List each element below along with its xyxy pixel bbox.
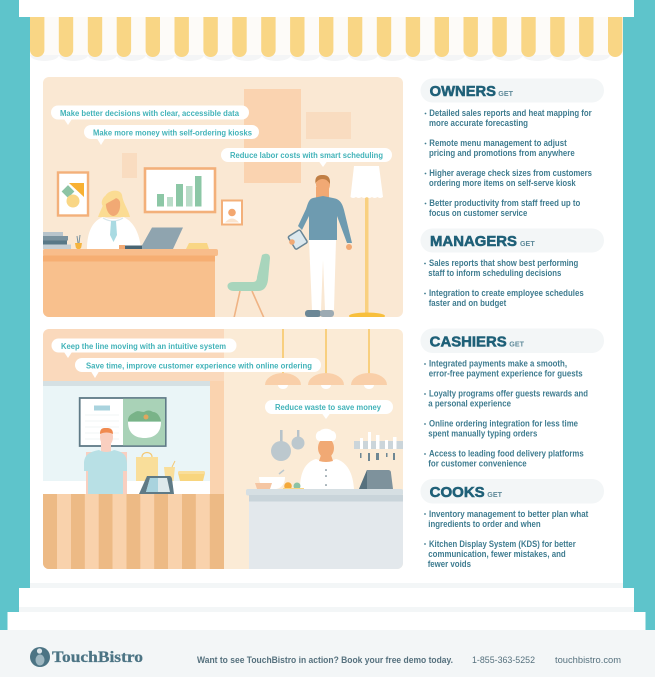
icon: abstract picture frame — [58, 172, 88, 216]
managers benefits list: Integration to create employee schedules — [429, 288, 584, 298]
owners benefits list: Better productivity from staff freed up to — [429, 198, 581, 208]
owners benefits list: Detailed sales reports and heat mapping for — [429, 108, 592, 118]
owners benefits list: ordering more items on self-serve kiosk — [429, 178, 576, 188]
managers benefits list: staff to inform scheduling decisions — [428, 268, 561, 278]
stack of books and pencil cup — [43, 232, 82, 249]
heading: owners — [420, 78, 604, 102]
cooks benefits list: Inventory management to better plan what — [429, 509, 588, 519]
heading: cooks: GET — [487, 490, 502, 499]
heading: managers: MANAGERS — [430, 234, 517, 250]
section: cashiers — [420, 328, 604, 469]
cashiers benefits list: Loyalty programs offer guests rewards and — [429, 389, 588, 399]
callout: self-ordering kiosks — [84, 125, 259, 145]
counter with stripes — [43, 494, 224, 569]
owners benefits list — [425, 108, 592, 218]
cooks benefits list: fewer voids — [428, 559, 471, 569]
chef — [300, 429, 354, 489]
owners benefits list: Higher average check sizes from customers — [429, 168, 592, 178]
website: touchbistro.com — [555, 655, 621, 665]
heading: owners: GET — [498, 89, 513, 98]
callout: better decisions — [51, 106, 249, 125]
callout: intuitive system: Keep the line moving with an intuitive system — [61, 341, 226, 351]
heading: cashiers: CASHIERS — [430, 334, 507, 350]
footer bar — [0, 630, 655, 677]
managers benefits list — [424, 258, 584, 308]
heading: owners: OWNERS — [430, 84, 496, 100]
cooks benefits list — [424, 509, 588, 569]
call to action: Want to see TouchBistro in action? Book your free demo today. — [197, 655, 453, 665]
cooks benefits list: ingredients to order and when — [428, 519, 541, 529]
callout: self-ordering kiosks: Make more money with self-ordering kiosks — [93, 128, 252, 138]
icon: portrait frame — [222, 200, 242, 224]
cooks benefits list: Kitchen Display System (KDS) for better — [429, 539, 576, 549]
owners benefits list: Remote menu management to adjust — [429, 138, 567, 148]
desk — [43, 249, 218, 318]
awning top bar — [19, 0, 634, 17]
storefront steps — [8, 583, 646, 630]
cashiers benefits list: Integrated payments make a smooth, — [429, 359, 567, 369]
cashier — [84, 428, 127, 494]
callout: intuitive system — [52, 338, 236, 358]
section: cooks — [420, 479, 604, 569]
heading: managers — [420, 228, 604, 252]
heading: cooks: COOKS — [430, 485, 485, 501]
heading: cashiers — [420, 328, 604, 353]
bowls and food — [255, 470, 304, 490]
callout: smart scheduling — [221, 148, 392, 167]
kitchen counter — [246, 489, 403, 570]
panel: owner office scene — [43, 77, 403, 320]
heading: cashiers: GET — [509, 340, 524, 348]
callout: smart scheduling: Reduce labor costs with smart scheduling — [230, 150, 383, 160]
cashiers benefits list: Access to leading food delivery platforms — [429, 449, 584, 459]
heading: managers: GET — [520, 239, 535, 248]
kitchen display tablet — [359, 470, 393, 489]
callout: online ordering — [75, 358, 321, 378]
laptop — [119, 228, 183, 249]
callout: reduce waste — [265, 400, 393, 419]
callout: online ordering: Save time, improve customer experience with online ordering — [86, 360, 312, 370]
panel: restaurant counter and kitchen scene — [43, 329, 403, 570]
cashiers benefits list: spent manually typing orders — [428, 429, 537, 439]
section: owners — [420, 78, 604, 218]
hanging lamps — [265, 329, 387, 389]
owners benefits list: focus on customer service — [429, 208, 527, 218]
cashiers benefits list — [424, 359, 588, 469]
managers benefits list: Sales reports that show best performing — [429, 258, 578, 268]
brand name: TouchBistro — [52, 649, 143, 666]
cashiers benefits list: Online ordering integration for less time — [429, 419, 578, 429]
knife rack — [354, 432, 403, 461]
menu display screen — [80, 398, 166, 446]
takeout bag, cup and tray — [136, 452, 205, 481]
point of sale tablet — [139, 476, 174, 494]
cashiers benefits list: error-free payment experience for guests — [429, 369, 583, 379]
cashiers benefits list: a personal experience — [428, 399, 511, 409]
managers benefits list: faster and on budget — [429, 298, 506, 308]
section: managers — [420, 228, 604, 308]
cashiers benefits list: for customer convenience — [428, 459, 527, 469]
hanging pans — [271, 430, 304, 461]
cooks benefits list: communication, fewer mistakes, and — [428, 549, 566, 559]
bar chart wall frame — [145, 168, 215, 212]
desk nameplate — [186, 243, 209, 249]
heading: cooks — [420, 479, 604, 504]
chair — [227, 254, 270, 318]
icon: TouchBistro logo mark — [30, 647, 50, 667]
phone number: 1-855-363-5252 — [472, 655, 535, 665]
callout: reduce waste: Reduce waste to save money — [275, 402, 381, 412]
awning stripes — [30, 17, 623, 61]
woman at desk — [87, 191, 141, 249]
floor lamp — [349, 166, 385, 320]
owners benefits list: pricing and promotions from anywhere — [429, 148, 575, 158]
man with tablet — [288, 175, 352, 317]
owners benefits list: more accurate forecasting — [429, 118, 528, 128]
callout: better decisions: Make better decisions with clear, accessible data — [60, 108, 239, 118]
